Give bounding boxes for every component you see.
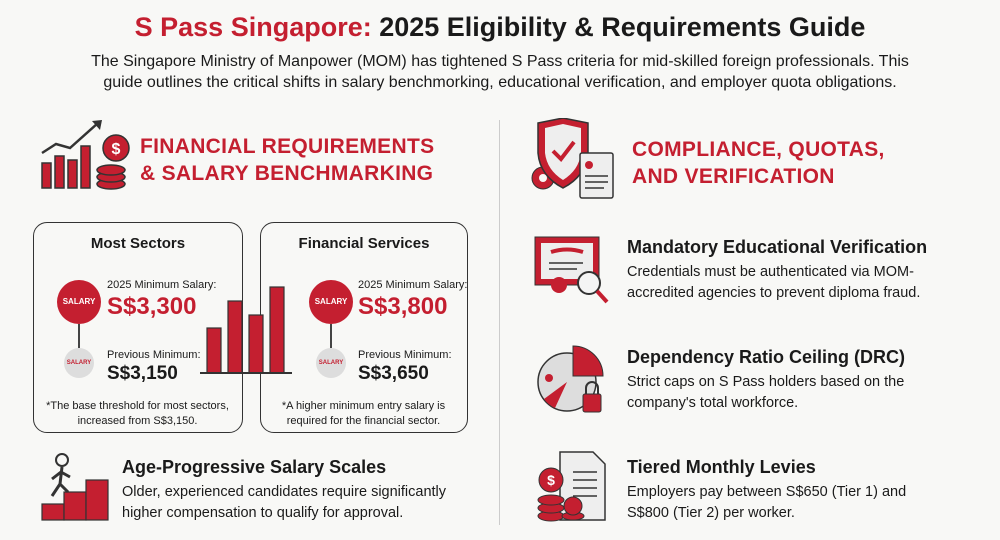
subtitle: The Singapore Ministry of Manpower (MOM) has tightened S Pass criteria for mid-skilled foreign professionals. This [91,53,909,70]
item: drc: company's total workforce. [627,395,798,411]
icon: salary grey [64,348,94,378]
item: age-progressive: Older, experienced candidates require significantly [122,484,446,500]
panel: financial services: SALARY [319,360,343,366]
panel: financial services: S$3,650 [358,363,429,384]
panel: financial services: 2025 Minimum Salary: [358,279,467,291]
icon: growth chart with coins: $ [112,141,121,158]
title: S Pass Singapore: 2025 Eligibility & Requirements Guide [135,12,865,42]
item: age-progressive [122,457,446,521]
heading: compliance: AND VERIFICATION [632,165,835,188]
icon: pie with lock [537,346,604,412]
heading: compliance [632,138,885,188]
subtitle [91,53,909,91]
item: education [627,237,927,301]
icon: stairs climber [41,453,109,521]
panel: most sectors: 2025 Minimum Salary: [107,279,216,291]
panel: most sectors: *The base threshold for most sectors, [46,400,229,412]
item: drc: Dependency Ratio Ceiling (DRC) [627,347,905,367]
heading: financial requirements: FINANCIAL REQUIREMENTS [140,135,434,158]
panel: financial services: Financial Services [299,235,429,252]
icon: salary red: SALARY [63,297,95,306]
heading: financial requirements [140,135,434,185]
icon: growth chart with coins [41,120,130,190]
icon: shield gear doc [532,118,614,199]
panel: most sectors: S$3,300 [107,293,196,320]
icon: coins with document: $ [547,472,555,488]
item: levies [627,457,906,521]
panel: financial services: *A higher minimum entry salary is [282,400,445,412]
icon: salary grey: SALARY [67,360,91,366]
panel: most sectors: increased from S$3,150. [78,415,197,427]
heading: financial requirements: & SALARY BENCHMARKING [140,162,433,185]
panel: most sectors: Previous Minimum: [107,349,201,361]
item: age-progressive: higher compensation to qualify for approval. [122,505,403,521]
icon: salary red [57,280,101,324]
panel: most sectors [33,222,243,433]
item: levies: S$800 (Tier 2) per worker. [627,505,795,521]
panel: financial services: required for the financial sector. [287,415,440,427]
icon: coins with document [538,451,606,522]
item: education: accredited agencies to prevent diploma fraud. [627,285,920,301]
item: levies: Employers pay between S$650 (Tier 1) and [627,484,906,500]
panel: financial services: Previous Minimum: [358,349,452,361]
item: drc: Strict caps on S Pass holders based on the [627,374,904,390]
icon: certificate [534,236,608,304]
subtitle: guide outlines the critical shifts in salary benchmorking, educational verification, and employer quota obligations. [103,74,897,91]
item: levies: Tiered Monthly Levies [627,457,816,477]
item: education: Credentials must be authenticated via MOM- [627,264,914,280]
heading: compliance: COMPLIANCE, QUOTAS, [632,138,885,161]
item: age-progressive: Age-Progressive Salary Scales [122,457,386,477]
bar chart [200,286,292,374]
item: drc [627,347,905,411]
panel: financial services [260,222,468,433]
panel: financial services: SALARY [315,297,347,306]
panel: most sectors: S$3,150 [107,363,178,384]
panel: financial services: S$3,800 [358,293,447,320]
panel: most sectors: Most Sectors [91,235,185,252]
item: education: Mandatory Educational Verification [627,237,927,257]
